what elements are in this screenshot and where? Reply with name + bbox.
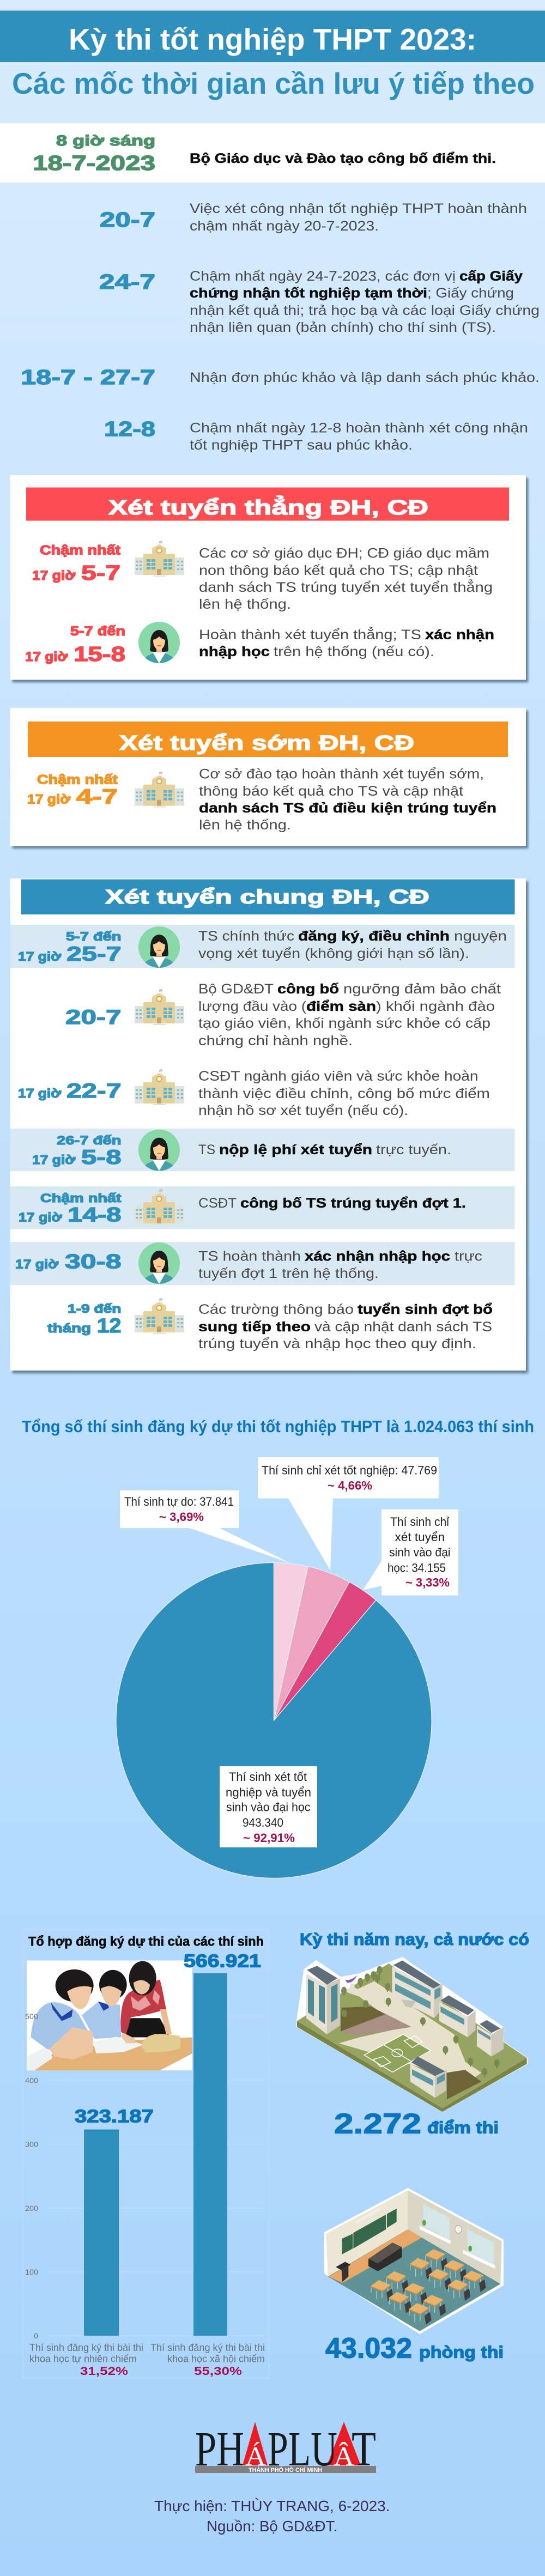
milestone: 12-8: Chậm nhất ngày 12-8 hoàn thành xét công nhận	[190, 421, 528, 436]
row: chậm nhất 17 giờ 5-7: Các cơ sở giáo dục ĐH; CĐ giáo dục mầm	[199, 546, 489, 561]
title: Các mốc thời gian cần lưu ý tiếp theo	[12, 66, 535, 100]
pie chart	[116, 1457, 458, 1878]
row: 20-7: lượng đầu vào (	[198, 999, 307, 1014]
bar chart: tổ hợp đăng ký dự thi	[23, 1930, 269, 2378]
milestone: 24-7: cấp Giấy	[459, 269, 523, 284]
row: 17 giờ 30-8: xác nhận nhập học	[305, 1249, 450, 1264]
heading: xét tuyển chung	[21, 880, 514, 914]
row: chậm nhất 14-8: 17 giờ	[19, 1210, 62, 1224]
milestone: 20-7: chậm nhất ngày 20-7-2023.	[190, 219, 379, 234]
stat: 2.272 điểm thi: điểm thi	[427, 2118, 499, 2137]
y axis labels	[25, 2012, 38, 2340]
milestone: 18-7 to 27-7: Nhận đơn phúc khảo và lập danh sách phúc khảo.	[190, 370, 540, 385]
row: chậm nhất 17 giờ 4-7: lên hệ thống.	[199, 817, 291, 833]
row: 17 giờ 22-7: 22-7	[66, 1080, 121, 1102]
row: 20-7: 20-7	[65, 1006, 121, 1028]
row: 26-7 đến 5-8: nộp lệ phí xét tuyển	[219, 1142, 372, 1157]
milestone: 18-7-2023	[33, 132, 496, 175]
chart title: Tổ hợp đăng ký dự thi của các thí sinh	[28, 1935, 264, 1949]
milestone: 24-7: nhận kết quả thi; trả học bạ và các loại Giấy chứng	[190, 303, 540, 318]
callout: thí sinh xét tốt nghiệp và tuyển sinh: Thí sinh xét tốt	[229, 1770, 307, 1784]
panel: xét tuyển thẳng	[10, 475, 528, 682]
milestone: 20-7: Việc xét công nhận tốt nghiệp THPT hoàn thành	[190, 201, 527, 216]
milestone: 20-7: 20-7	[100, 209, 155, 232]
panel: timeline milestones	[0, 123, 545, 453]
logo: Pháp Luật: Â	[334, 2441, 354, 2471]
row: 5-7 đến 17 giờ 15-8	[25, 622, 494, 666]
milestone: 20-7	[100, 201, 527, 234]
y axis labels: 400	[25, 2076, 38, 2085]
x label: khoa học xã hội: Thí sinh đăng ký thi bài thi	[150, 2342, 265, 2353]
row: 20-7: chứng chỉ hành nghề.	[198, 1033, 353, 1048]
title	[0, 11, 545, 100]
row: 26-7 đến 5-8: 5-8	[81, 1146, 121, 1168]
callout: thí sinh xét tốt nghiệp và tuyển sinh	[220, 1766, 317, 1847]
row: 26-7 đến 5-8: TS	[198, 1142, 215, 1157]
row: 5-7 đến 17 giờ 15-8: 5-7 đến	[70, 624, 125, 639]
milestone: 24-7: ; Giấy chứng	[427, 286, 514, 301]
logo: Pháp Luật: PH	[195, 2422, 244, 2476]
row: chậm nhất 17 giờ 4-7: Cơ sở đào tạo hoàn thành xét tuyển sớm,	[199, 766, 484, 781]
callout: thí sinh xét tốt nghiệp và tuyển sinh: sinh vào đại học	[226, 1801, 311, 1814]
milestone: 12-8	[104, 418, 528, 453]
callout: thí sinh xét tốt nghiệp và tuyển sinh: 943.340	[243, 1816, 283, 1829]
logo: Pháp Luật: THÀNH PHỐ HỒ CHÍ MINH	[249, 2466, 322, 2474]
row: 26-7 đến 5-8: trực tuyến.	[376, 1142, 451, 1157]
row: 5-7 đến 17 giờ 15-8: nhập học	[199, 644, 270, 659]
milestone: 18-7 to 27-7: 18-7 - 27-7	[21, 366, 155, 389]
credits: Thực hiện: THÙY TRANG, 6-2023.	[154, 2498, 390, 2514]
row: 1-9 đến tháng 12: và cập nhật danh sách TS	[314, 1319, 492, 1335]
row: 20-7: Bộ GD&ĐT	[198, 981, 274, 997]
callout: thí sinh chỉ xét tốt nghiệp: ~ 4,66%	[328, 1479, 372, 1492]
y axis labels: 100	[25, 2268, 38, 2276]
milestone: 12-8: tốt nghiệp THPT sau phúc khảo.	[190, 438, 413, 453]
row: 17 giờ 22-7: 17 giờ	[18, 1086, 62, 1100]
x label: khoa học tự nhiên: khoa học tự nhiên chiếm	[29, 2354, 137, 2365]
row: 26-7 đến 5-8: 17 giờ	[32, 1153, 76, 1167]
row: 1-9 đến tháng 12	[47, 1298, 493, 1351]
row: 20-7: ngưỡng đảm bảo chất	[343, 981, 501, 997]
row: 5-7 đến 25-7: nguyện	[454, 929, 507, 944]
row: chậm nhất 17 giờ 5-7	[32, 541, 493, 612]
illustration: exam classroom	[324, 2188, 504, 2334]
row: 1-9 đến tháng 12: 12	[97, 1314, 121, 1337]
callout: thí sinh chỉ xét tuyển sinh: xét tuyển	[395, 1530, 445, 1544]
stat: 43.032 phòng thi: 43.032	[325, 2332, 412, 2364]
row: 5-7 đến 17 giờ 15-8: 15-8	[74, 643, 125, 666]
y axis labels: 200	[25, 2204, 38, 2213]
x label: khoa học xã hội: khoa học xã hội chiếm	[167, 2354, 265, 2365]
milestone: 24-7	[99, 269, 540, 335]
heading: xét tuyển sớm: Xét tuyển sớm ĐH, CĐ	[119, 732, 414, 755]
callout: thí sinh chỉ xét tuyển sinh: Thí sinh chỉ	[390, 1515, 449, 1529]
callout: thí sinh chỉ xét tuyển sinh: học: 34.155	[387, 1561, 446, 1575]
row: chậm nhất 17 giờ 4-7: thông báo kết quả cho TS và cập nhật	[199, 784, 463, 799]
row: 5-7 đến 25-7: 17 giờ	[18, 949, 62, 963]
row: 5-7 đến 25-7: vọng xét tuyển (không giới hạn số lần).	[198, 946, 469, 961]
row: chậm nhất 14-8	[19, 1189, 466, 1226]
x label: khoa học xã hội: 55,30%	[194, 2365, 242, 2378]
row: 17 giờ 30-8: 30-8	[65, 1251, 121, 1273]
stat: 43.032 phòng thi	[325, 2332, 504, 2364]
heading: xét tuyển chung: Xét tuyển chung ĐH, CĐ	[105, 886, 429, 908]
row: chậm nhất 17 giờ 4-7: Chậm nhất	[37, 773, 118, 787]
y axis labels: 0	[34, 2331, 38, 2340]
heading: kỳ thi năm nay: Kỳ thi năm nay, cả nước có	[300, 1930, 529, 1949]
row: 5-7 đến 25-7	[18, 926, 507, 968]
row: chậm nhất 17 giờ 5-7: Chậm nhất	[40, 543, 120, 558]
x label: khoa học tự nhiên: 31,52%	[80, 2365, 128, 2378]
callout: thí sinh xét tốt nghiệp và tuyển sinh: ~ 92,91%	[243, 1831, 295, 1845]
callout: thí sinh chỉ xét tốt nghiệp	[258, 1457, 439, 1571]
row: 20-7: tạo giáo viên, khối ngành sức khỏe có cấp	[198, 1016, 491, 1031]
heading: xét tuyển thẳng: Xét tuyển thẳng ĐH, CĐ	[108, 495, 428, 519]
row: chậm nhất 14-8: công bố TS trúng tuyển đợt 1.	[240, 1196, 466, 1211]
row: 17 giờ 30-8: 17 giờ	[15, 1257, 59, 1271]
row: 5-7 đến 25-7: TS chính thức	[198, 929, 294, 944]
bar: khoa học xã hội	[184, 1951, 261, 2336]
row: chậm nhất 17 giờ 4-7: 17 giờ	[27, 792, 71, 807]
heading: xét tuyển sớm	[28, 722, 508, 757]
row: 26-7 đến 5-8	[32, 1130, 451, 1171]
callout: thí sinh tự do	[120, 1490, 290, 1563]
photo: students and teacher studying	[27, 1961, 192, 2070]
row: chậm nhất 17 giờ 5-7: 17 giờ	[32, 568, 76, 583]
row: chậm nhất 14-8: 14-8	[68, 1203, 121, 1226]
heading: xét tuyển thẳng	[26, 487, 509, 521]
row: chậm nhất 17 giờ 5-7: 5-7	[81, 562, 120, 585]
logo: Pháp Luật: PLU	[268, 2422, 337, 2476]
illustration: exam site campus	[296, 1957, 528, 2112]
row: 1-9 đến tháng 12: tuyển sinh đợt bổ	[358, 1302, 493, 1317]
milestone: 24-7: nhận liên quan (bản chính) cho thí sinh (TS).	[190, 320, 496, 335]
row: 20-7	[65, 981, 501, 1048]
milestone: 24-7: Chậm nhất ngày 24-7-2023, các đơn vị	[190, 269, 456, 284]
row: 17 giờ 30-8: tuyến đợt 1 trên hệ thống.	[198, 1266, 379, 1281]
logo: Pháp Luật	[195, 2422, 376, 2476]
milestone: 24-7: chứng nhận tốt nghiệp tạm thời	[190, 286, 427, 301]
milestone: 12-8: 12-8	[104, 418, 155, 441]
row: chậm nhất 17 giờ 5-7: lên hệ thống.	[199, 597, 291, 612]
stat: 2.272 điểm thi: 2.272	[334, 2108, 421, 2140]
row: 17 giờ 30-8: trực	[455, 1249, 482, 1264]
bar: khoa học tự nhiên	[75, 2106, 154, 2336]
row: 1-9 đến tháng 12: 1-9 đến	[68, 1302, 121, 1316]
row: chậm nhất 17 giờ 5-7: non thông báo kết quả cho TS; cập nhật	[199, 563, 478, 578]
callout: thí sinh tự do: ~ 3,69%	[159, 1510, 204, 1524]
callout: thí sinh chỉ xét tốt nghiệp: Thí sinh chỉ xét tốt nghiệp: 47.769	[262, 1463, 437, 1477]
row: 20-7: ) khối ngành đào	[376, 999, 495, 1014]
title: Kỳ thi tốt nghiệp THPT 2023:	[69, 22, 476, 56]
panel: xét tuyển sớm	[10, 708, 528, 848]
callout: thí sinh chỉ xét tuyển sinh: sinh vào đại	[389, 1545, 450, 1559]
row: 17 giờ 22-7: thành việc điều chỉnh, công bố mức điểm	[198, 1086, 490, 1101]
y axis labels: 500	[25, 2012, 38, 2021]
row: 1-9 đến tháng 12: tháng	[47, 1321, 91, 1335]
row: chậm nhất 17 giờ 4-7: danh sách TS đủ điều kiện trúng tuyển	[199, 801, 496, 816]
x label: khoa học tự nhiên	[29, 2342, 143, 2378]
credits: Nguồn: Bộ GD&ĐT.	[207, 2518, 337, 2535]
row: 17 giờ 30-8: TS hoàn thành	[198, 1249, 301, 1264]
logo: Pháp Luật: Á	[245, 2441, 266, 2471]
milestone: 18-7-2023: 18-7-2023	[33, 152, 155, 175]
row: 17 giờ 30-8	[15, 1242, 482, 1284]
milestone: 18-7 to 27-7	[21, 366, 540, 389]
row: 17 giờ 22-7: nhận hồ sơ xét tuyển (nếu có).	[198, 1103, 408, 1118]
stat: 43.032 phòng thi: phòng thi	[419, 2342, 504, 2362]
callout: thí sinh chỉ xét tuyển sinh	[363, 1510, 458, 1596]
row: 26-7 đến 5-8: 26-7 đến	[57, 1134, 121, 1147]
milestone: 24-7: 24-7	[99, 271, 155, 294]
bar: khoa học tự nhiên: 323.187	[75, 2106, 154, 2126]
row: 20-7: điểm sàn	[306, 999, 376, 1014]
milestone: 18-7-2023: Bộ Giáo dục và Đào tạo công bố điểm thi.	[190, 151, 496, 166]
row: 20-7: công bố	[277, 981, 339, 997]
row: 1-9 đến tháng 12: Các trường thông báo	[198, 1302, 354, 1317]
row: chậm nhất 17 giờ 4-7: 4-7	[76, 785, 118, 808]
row: 5-7 đến 17 giờ 15-8: xác nhận	[425, 627, 494, 643]
row: 1-9 đến tháng 12: trúng tuyển và nhập học theo quy định.	[198, 1336, 476, 1351]
row: chậm nhất 14-8: CSĐT	[198, 1196, 237, 1211]
row: 17 giờ 22-7: CSĐT ngành giáo viên và sức khỏe hoàn	[198, 1069, 479, 1084]
callout: thí sinh xét tốt nghiệp và tuyển sinh: nghiệp và tuyển	[226, 1786, 311, 1799]
row: chậm nhất 17 giờ 5-7: danh sách TS trúng tuyển xét tuyển thẳng	[199, 579, 493, 595]
row: 1-9 đến tháng 12: sung tiếp theo	[198, 1319, 311, 1335]
y axis labels: 300	[25, 2140, 38, 2149]
row: 5-7 đến 25-7: 5-7 đến	[66, 930, 121, 943]
x label: khoa học xã hội	[150, 2342, 265, 2378]
milestone: 18-7-2023: 8 giờ sáng	[56, 132, 155, 149]
callout: thí sinh chỉ xét tuyển sinh: ~ 3,33%	[405, 1576, 450, 1589]
bar: khoa học xã hội: 566.921	[184, 1951, 261, 1971]
row: 5-7 đến 25-7: 25-7	[66, 943, 121, 965]
row: 17 giờ 22-7	[18, 1069, 490, 1118]
logo: Pháp Luật: T	[352, 2422, 376, 2476]
row: chậm nhất 14-8: Chậm nhất	[40, 1191, 122, 1205]
callout: thí sinh tự do: Thí sinh tự do: 37.841	[124, 1495, 234, 1508]
x label: khoa học tự nhiên: Thí sinh đăng ký thi bài thi	[29, 2342, 143, 2353]
row: 5-7 đến 17 giờ 15-8: Hoàn thành xét tuyển thẳng; TS	[199, 626, 421, 643]
row: 5-7 đến 17 giờ 15-8: 17 giờ	[25, 650, 68, 664]
credits	[154, 2498, 390, 2535]
panel: xét tuyển chung	[10, 878, 528, 1373]
row: 5-7 đến 17 giờ 15-8: trên hệ thống (nếu có).	[274, 644, 434, 659]
row: chậm nhất 17 giờ 4-7	[27, 766, 496, 833]
stat: 2.272 điểm thi	[334, 2108, 499, 2140]
row: 5-7 đến 25-7: đăng ký, điều chỉnh	[298, 929, 450, 944]
